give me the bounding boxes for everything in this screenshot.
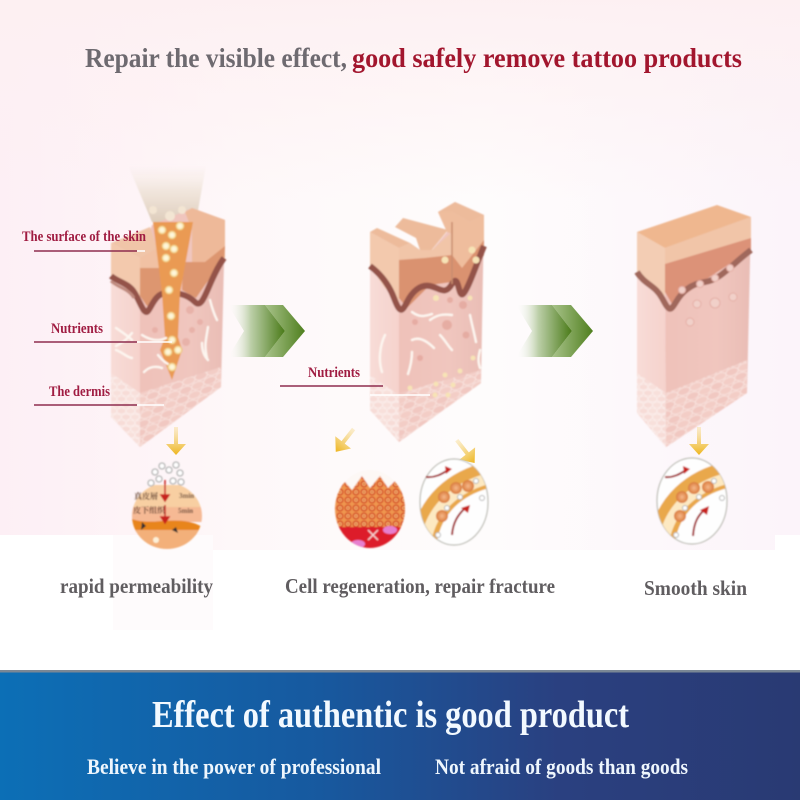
title xyxy=(85,43,742,73)
slot in the surface xyxy=(451,222,453,284)
icon: permeability diagram xyxy=(130,462,204,552)
arrow: yellow down 1 xyxy=(166,427,186,455)
callouts: block 1 labels: The surface of the skin xyxy=(22,229,146,245)
peach epidermis xyxy=(399,232,452,262)
right face xyxy=(665,217,751,447)
wavy dermis junction xyxy=(637,250,751,309)
right face xyxy=(399,202,484,442)
panel: skin block regenerating xyxy=(370,202,484,442)
white fibres xyxy=(380,312,480,374)
top surface xyxy=(637,205,751,248)
left face xyxy=(370,232,399,442)
wavy dermis junction xyxy=(111,258,224,312)
top surfaces xyxy=(370,228,410,248)
diagram labels: 皮下组织 xyxy=(133,505,166,515)
step captions: Cell regeneration, repair fracture xyxy=(285,574,555,598)
red dermal spots xyxy=(412,297,470,361)
product beam xyxy=(128,165,206,222)
panel: skin block with product penetrating xyxy=(111,165,225,447)
epidermis band xyxy=(665,217,751,266)
arrow: yellow down 3 xyxy=(689,427,709,455)
diagram labels xyxy=(133,491,194,515)
panel: blue footer banner xyxy=(0,670,800,800)
callout: block 2 nutrients: Nutrients xyxy=(308,365,360,381)
callouts: block 1 labels: Nutrients xyxy=(51,321,103,337)
title: Repair the visible effect, xyxy=(85,43,347,73)
bubbles xyxy=(148,462,184,486)
banner slogan left: Believe in the power of professional xyxy=(87,754,381,779)
step captions: rapid permeability xyxy=(60,574,213,598)
diagram labels: 真皮層 xyxy=(134,491,158,501)
icon: vessel circle 1 xyxy=(420,459,492,545)
dermal spots xyxy=(678,264,737,326)
diagram labels: 5min xyxy=(178,507,193,515)
title: good safely remove tattoo products xyxy=(352,43,742,73)
right face xyxy=(140,208,225,447)
orange channel xyxy=(153,222,193,380)
peach top surfaces xyxy=(111,227,157,258)
bubbles xyxy=(149,206,186,372)
callouts: block 1 labels: The dermis xyxy=(49,384,110,400)
panel: smooth skin block xyxy=(637,205,751,447)
arrow: yellow down-left xyxy=(328,423,361,458)
orange bands xyxy=(140,268,164,306)
diagram labels: 3min xyxy=(179,492,194,500)
arrow: green chevrons 2 xyxy=(516,305,593,357)
left face xyxy=(637,232,666,447)
red depth arrows xyxy=(161,480,169,523)
banner heading: Effect of authentic is good product xyxy=(152,694,629,736)
callouts: block 1 labels xyxy=(22,229,172,405)
step captions xyxy=(60,574,747,600)
left face xyxy=(111,243,140,447)
icon: cell regeneration circle xyxy=(334,475,406,550)
nutrient granules xyxy=(408,246,480,398)
icon: vessel circle 2 xyxy=(657,458,730,544)
banner slogan right: Not afraid of goods than goods xyxy=(435,754,688,779)
white fibres xyxy=(116,300,217,372)
dermal spots xyxy=(152,306,203,346)
orange band xyxy=(399,240,484,308)
arrow: yellow down-right xyxy=(449,434,482,469)
step captions: Smooth skin xyxy=(644,576,747,600)
arrow: green chevrons 1 xyxy=(228,305,305,357)
wavy dermis junction xyxy=(370,246,484,310)
